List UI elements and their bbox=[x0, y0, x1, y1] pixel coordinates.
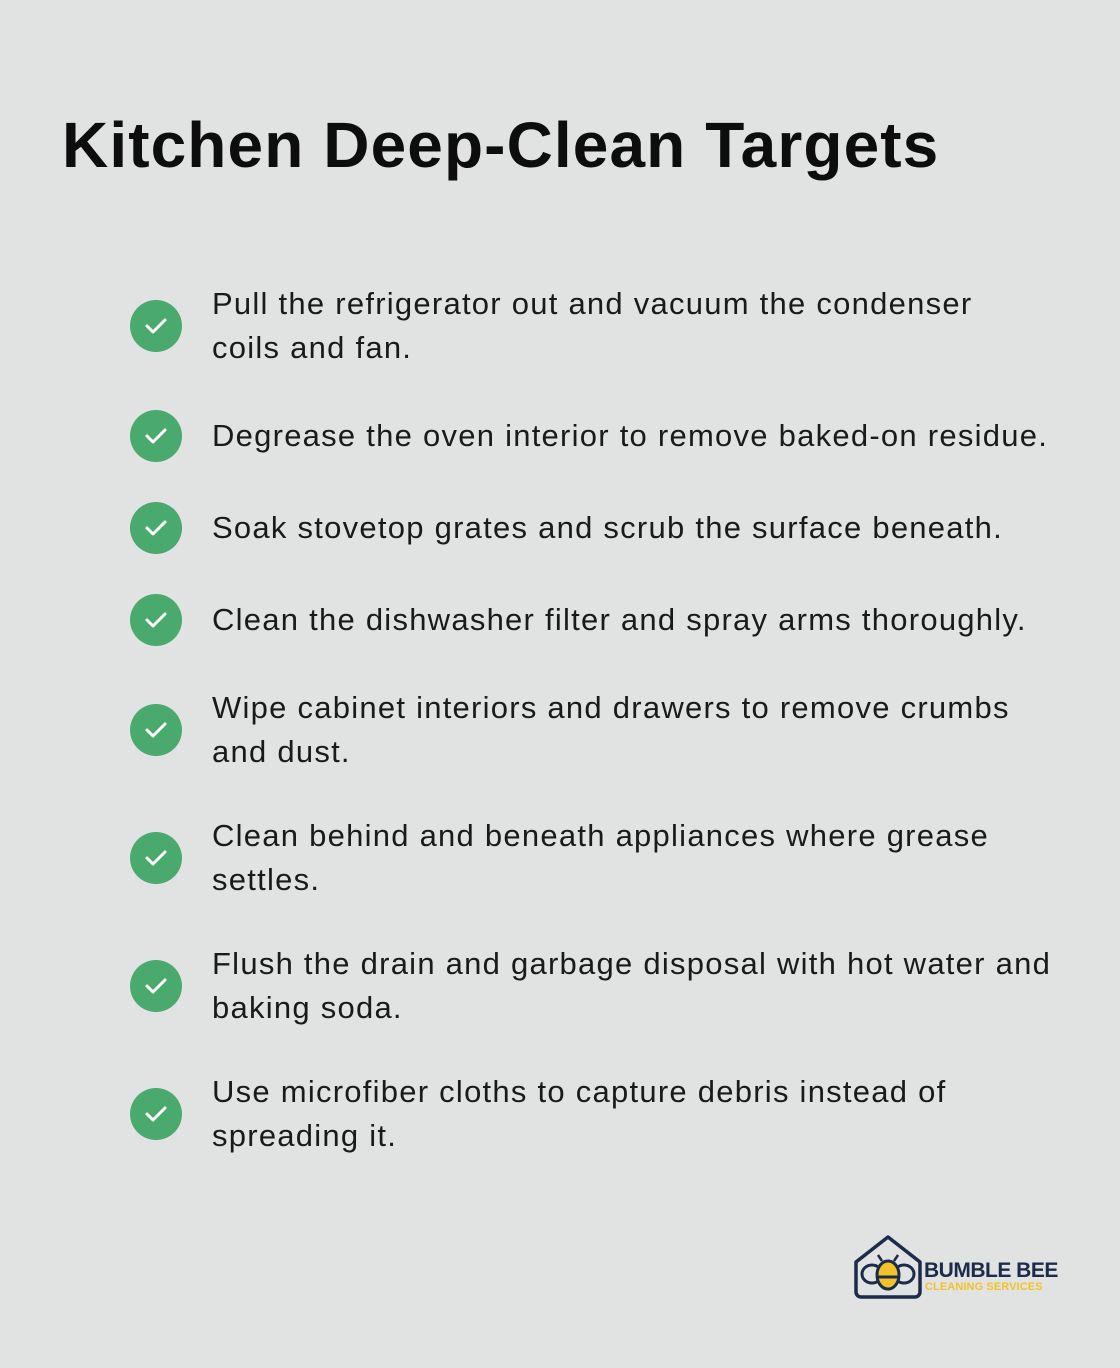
item 3 bbox=[130, 502, 1003, 554]
item 4: Clean the dishwasher filter and spray arms thoroughly. bbox=[212, 602, 1027, 637]
item 3: Soak stovetop grates and scrub the surface beneath. bbox=[212, 510, 1003, 545]
item 6: settles. bbox=[212, 862, 320, 897]
item 6: Clean behind and beneath appliances where grease bbox=[212, 818, 989, 853]
item 8: Use microfiber cloths to capture debris instead of bbox=[212, 1074, 946, 1109]
item 8: spreading it. bbox=[212, 1118, 397, 1153]
icon: house bee bbox=[854, 1235, 922, 1299]
item 7 bbox=[130, 946, 1051, 1025]
logo text: BUMBLE BEE bbox=[924, 1259, 1058, 1282]
item 7: baking soda. bbox=[212, 990, 403, 1025]
item 2: Degrease the oven interior to remove baked-on residue. bbox=[212, 418, 1048, 453]
item 5: Wipe cabinet interiors and drawers to remove crumbs bbox=[212, 690, 1010, 725]
item 1: Pull the refrigerator out and vacuum the condenser bbox=[212, 286, 972, 321]
item 5 bbox=[130, 690, 1010, 769]
logo bbox=[854, 1235, 1058, 1299]
item 1 bbox=[130, 286, 972, 365]
logo: CLEANING SERVICES bbox=[925, 1281, 1043, 1293]
item 8 bbox=[130, 1074, 946, 1153]
item 6 bbox=[130, 818, 989, 897]
title: Kitchen Deep-Clean Targets bbox=[62, 109, 939, 181]
item 4 bbox=[130, 594, 1027, 646]
item 1: coils and fan. bbox=[212, 330, 412, 365]
item 7: Flush the drain and garbage disposal with hot water and bbox=[212, 946, 1051, 981]
item 5: and dust. bbox=[212, 734, 351, 769]
item 2 bbox=[130, 410, 1048, 462]
